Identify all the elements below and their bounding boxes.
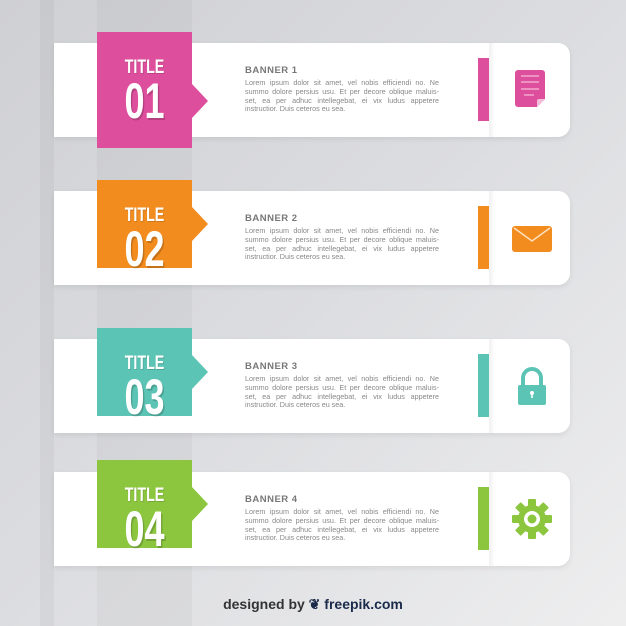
text block 1: summo dolore persius usu. Et per decore oblique maluis- [245,87,439,96]
text block 1: instructior. Duis ceteros eu sea. [245,104,345,113]
color bar teal [478,354,489,417]
text block 3: instructior. Duis ceteros eu sea. [245,400,345,409]
text block 4: set, ea per adhuc intellegebat, ei vix ludus appetere [245,525,439,534]
icon: padlock [518,367,546,405]
tab: title 01: TITLE [125,57,164,78]
tab: title 03: TITLE [125,353,164,374]
text block 1 [245,78,439,113]
tab: title 03 [97,328,192,416]
text block 3: summo dolore persius usu. Et per decore oblique maluis- [245,383,439,392]
color bar green [478,487,489,550]
text block 2: summo dolore persius usu. Et per decore oblique maluis- [245,235,439,244]
tab: title 02: 02 [124,221,165,277]
text block 2: set, ea per adhuc intellegebat, ei vix ludus appetere [245,244,439,253]
icon: envelope [512,226,552,252]
panel: banner 3 [54,339,570,433]
tab: title 02: TITLE [125,205,164,226]
heading: banner 2: BANNER 2 [245,213,298,224]
heading: banner 4: BANNER 4 [245,494,298,505]
text block 1: Lorem ipsum dolor sit amet, vel nobis efficiendi no. Ne [245,78,439,87]
text block 2: Lorem ipsum dolor sit amet, vel nobis efficiendi no. Ne [245,226,439,235]
heading: banner 1: BANNER 1 [245,65,298,76]
color bar pink [478,58,489,121]
text block 4: summo dolore persius usu. Et per decore oblique maluis- [245,516,439,525]
color bar orange [478,206,489,269]
tab: title 04: TITLE [125,485,164,506]
panel: banner 4 [54,472,570,566]
icon: document [515,70,545,107]
heading: banner 3: BANNER 3 [245,361,298,372]
text block 1: set, ea per adhuc intellegebat, ei vix ludus appetere [245,96,439,105]
text block 2 [245,226,439,261]
tab: title 01: 01 [124,73,165,129]
text block 3: set, ea per adhuc intellegebat, ei vix ludus appetere [245,392,439,401]
text block 2: instructior. Duis ceteros eu sea. [245,252,345,261]
tab: title 04: 04 [124,501,165,557]
text block 4 [245,507,439,542]
footer credit: designed by ❦ freepik.com [223,596,403,612]
tab: title 01 [97,32,192,148]
text block 4: Lorem ipsum dolor sit amet, vel nobis efficiendi no. Ne [245,507,439,516]
tab: title 02 [97,180,192,268]
text block 4: instructior. Duis ceteros eu sea. [245,533,345,542]
text block 3 [245,374,439,409]
tab: title 03: 03 [124,369,165,425]
icon: gear [512,499,552,539]
tab: title 04 [97,460,192,548]
panel: banner 1 [54,43,570,137]
panel: banner 2 [54,191,570,285]
text block 3: Lorem ipsum dolor sit amet, vel nobis efficiendi no. Ne [245,374,439,383]
